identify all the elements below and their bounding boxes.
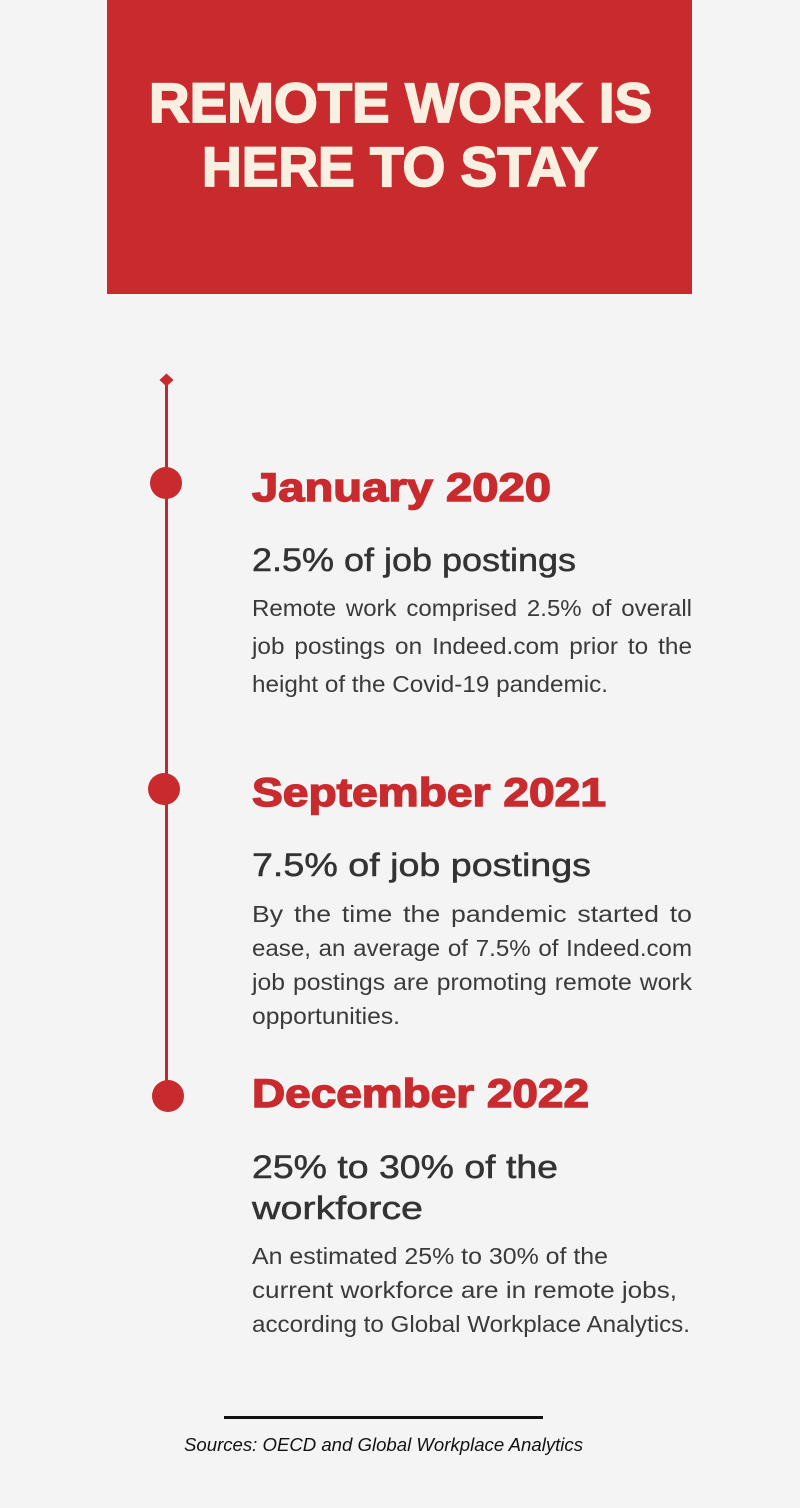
timeline marker: January 2020 bbox=[150, 467, 182, 499]
title: HERE TO STAY bbox=[202, 135, 598, 198]
text block: December 2022 description bbox=[252, 1243, 690, 1337]
title: REMOTE WORK IS bbox=[149, 71, 652, 134]
title banner bbox=[107, 0, 692, 294]
subheading: 25% to 30% of the workforce bbox=[251, 1149, 558, 1226]
text block: September 2021 description: job postings are promoting remote work bbox=[251, 969, 693, 995]
text block: January 2020 description: height of the Covid-19 pandemic. bbox=[252, 671, 608, 697]
subheading: 2.5% of job postings: 2.5% of job postings bbox=[252, 542, 576, 578]
icon: timeline start diamond bbox=[160, 374, 174, 386]
text block: December 2022 description: An estimated 25% to 30% of the bbox=[252, 1243, 608, 1269]
heading: September 2021: September 2021 bbox=[252, 771, 606, 815]
panel: December 2022 bbox=[251, 1072, 690, 1337]
text block: January 2020 description bbox=[251, 595, 692, 697]
text block: January 2020 description: Remote work comprised 2.5% of overall bbox=[252, 595, 692, 621]
panel: January 2020 bbox=[251, 466, 692, 697]
text block: January 2020 description: job postings on Indeed.com prior to the bbox=[251, 633, 692, 659]
heading: January 2020: January 2020 bbox=[252, 466, 551, 510]
text block: September 2021 description bbox=[251, 901, 693, 1029]
text block: December 2022 description: current workforce are in remote jobs, bbox=[252, 1277, 677, 1303]
subheading: 25% to 30% of the workforce: 25% to 30% of the bbox=[252, 1149, 558, 1185]
text block: September 2021 description: By the time the pandemic started to bbox=[252, 901, 692, 927]
panel: September 2021 bbox=[251, 771, 693, 1029]
timeline marker: December 2022 bbox=[152, 1080, 184, 1112]
text block: September 2021 description: opportunities. bbox=[252, 1003, 400, 1029]
timeline marker: September 2021 bbox=[148, 773, 180, 805]
subheading: 25% to 30% of the workforce: workforce bbox=[251, 1190, 423, 1226]
text block: December 2022 description: according to Global Workplace Analytics. bbox=[252, 1311, 690, 1337]
source note: Sources: OECD and Global Workplace Analytics bbox=[184, 1434, 583, 1455]
subheading: 7.5% of job postings: 7.5% of job postings bbox=[252, 847, 591, 883]
text block: September 2021 description: ease, an average of 7.5% of Indeed.com bbox=[252, 935, 692, 961]
title bbox=[149, 71, 652, 198]
heading: December 2022: December 2022 bbox=[252, 1072, 589, 1116]
timeline bbox=[148, 374, 184, 1112]
